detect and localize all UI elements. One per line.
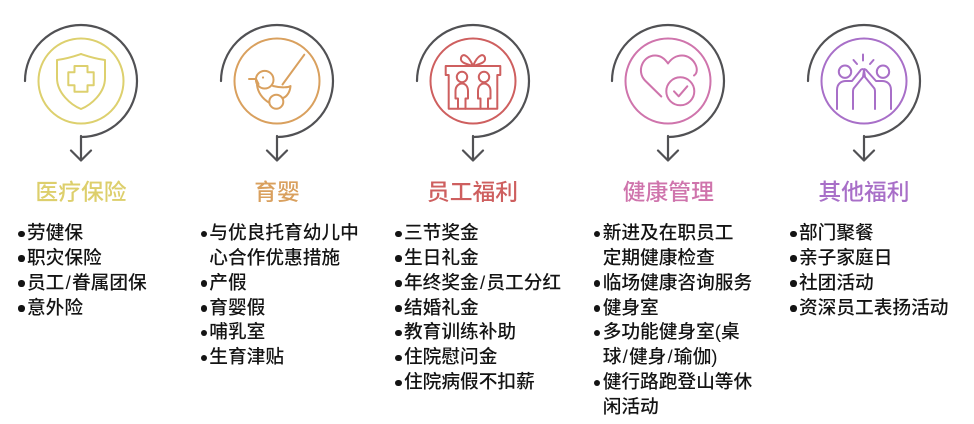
list: 医疗保险 items: 意外险 — [27, 297, 83, 318]
list: 员工福利 items: 教育训练补助 — [404, 321, 516, 342]
heading: 育婴: 育婴 — [254, 179, 300, 205]
list: 育婴 items: 与优良托育幼儿中 — [209, 222, 359, 243]
list: 健康管理 items: 闲活动 — [603, 396, 659, 417]
list: 其他福利 items: 社团活动 — [799, 272, 874, 293]
heading: 医疗保险: 医疗保险 — [35, 179, 127, 205]
list: 育婴 items: 育婴假 — [209, 297, 265, 318]
column: 员工福利 — [395, 24, 561, 392]
list: 员工福利 items: 三节奖金 — [404, 222, 479, 243]
list: 健康管理 items: 多功能健身室(桌 — [603, 321, 740, 342]
list: 育婴 items: 生育津贴 — [209, 346, 284, 367]
column: 医疗保险 — [18, 24, 147, 318]
list: 其他福利 items: 资深员工表扬活动 — [799, 297, 948, 318]
heading: 其他福利: 其他福利 — [818, 179, 910, 205]
list: 其他福利 items: 亲子家庭日 — [799, 247, 892, 268]
list: 健康管理 items: 球/健身/瑜伽) — [603, 346, 718, 367]
icon: heart with check mark and arrow — [610, 24, 726, 162]
list: 育婴 items — [201, 222, 359, 367]
list: 健康管理 items: 新进及在职员工 — [603, 222, 734, 243]
list: 健康管理 items: 健身室 — [603, 297, 659, 318]
list: 育婴 items: 产假 — [209, 272, 247, 293]
icon: gift box with two people and arrow — [416, 24, 530, 162]
heading: 健康管理: 健康管理 — [623, 179, 714, 205]
icon: shield with medical cross and arrow — [24, 24, 138, 162]
list: 育婴 items: 哺乳室 — [209, 321, 265, 342]
list: 员工福利 items: 生日礼金 — [404, 247, 479, 268]
list: 健康管理 items: 临场健康咨询服务 — [603, 272, 752, 293]
list: 医疗保险 items — [18, 222, 147, 318]
list: 健康管理 items — [594, 222, 752, 417]
list: 其他福利 items — [790, 222, 948, 318]
list: 医疗保险 items: 职灾保险 — [27, 247, 102, 268]
list: 育婴 items: 心合作优惠措施 — [209, 247, 340, 268]
icon: two people high five and arrow — [806, 24, 922, 162]
list: 员工福利 items: 结婚礼金 — [404, 297, 479, 318]
list: 医疗保险 items: 员工/眷属团保 — [27, 272, 147, 293]
column: 其他福利 — [790, 24, 948, 318]
list: 员工福利 items — [395, 222, 561, 392]
column: 育婴 — [201, 24, 359, 367]
list: 医疗保险 items: 劳健保 — [27, 222, 83, 243]
heading: 员工福利: 员工福利 — [427, 179, 518, 205]
list: 员工福利 items: 年终奖金/员工分红 — [404, 272, 561, 293]
list: 员工福利 items: 住院病假不扣薪 — [404, 371, 535, 392]
list: 健康管理 items: 定期健康检查 — [603, 247, 715, 268]
icon: toy duck and arrow — [220, 24, 334, 162]
list: 员工福利 items: 住院慰问金 — [404, 346, 497, 367]
list: 健康管理 items: 健行路跑登山等休 — [603, 371, 752, 392]
column: 健康管理 — [594, 24, 752, 417]
list: 其他福利 items: 部门聚餐 — [799, 222, 874, 243]
